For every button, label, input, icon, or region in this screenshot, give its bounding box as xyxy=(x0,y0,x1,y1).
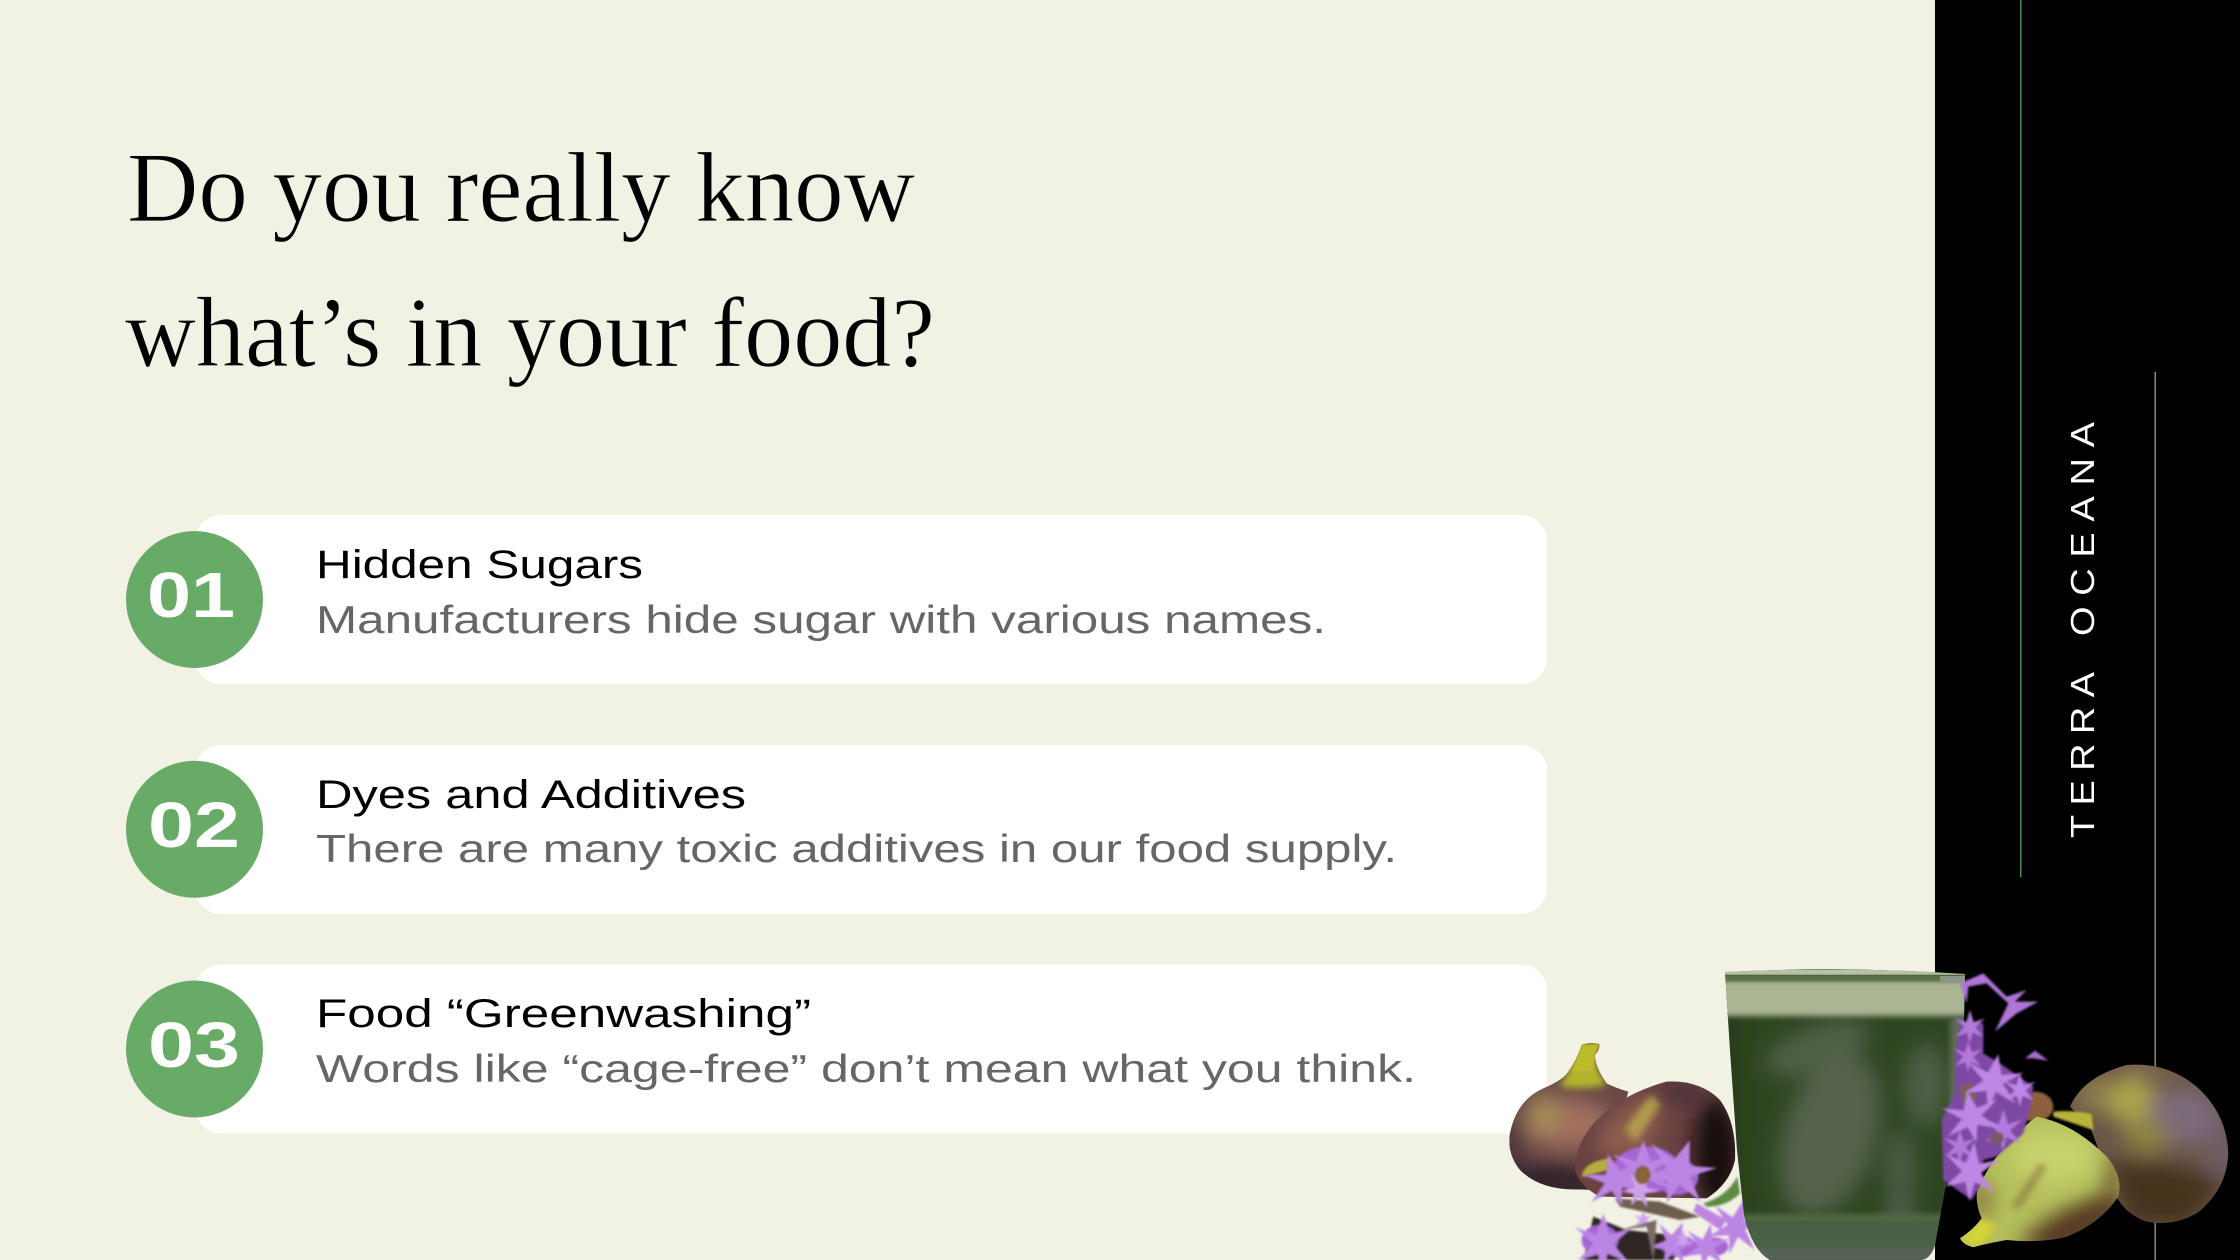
icon: left figs xyxy=(1509,1043,1755,1260)
icon: glass of green juice xyxy=(1720,965,1970,1260)
number badge 02 xyxy=(126,761,263,898)
image: figs, green juice and flowers xyxy=(1490,965,2233,1260)
fig back left xyxy=(1509,1043,1628,1190)
title: what’s in your food? xyxy=(125,277,935,388)
small fig behind xyxy=(2017,1092,2053,1122)
icon: right figs and flowers xyxy=(1939,973,2233,1257)
heading: Dyes and Additives: Dyes and Additives xyxy=(316,773,746,817)
number badge 03: 03 xyxy=(148,1009,240,1081)
fig front left xyxy=(1575,1082,1736,1198)
panel: item 03 xyxy=(126,964,1547,1134)
green vertical line right xyxy=(2154,372,2156,1260)
fig front right xyxy=(1960,1116,2120,1248)
title: Do you really know xyxy=(127,132,915,243)
panel: item 02 xyxy=(126,745,1547,914)
left flower cluster xyxy=(1576,1128,1769,1260)
heading: Hidden Sugars: Hidden Sugars xyxy=(316,543,643,587)
title xyxy=(125,132,935,388)
panel: item 01 xyxy=(126,515,1547,684)
brand name: TERRA OCEANA xyxy=(2064,422,2101,838)
fig back right xyxy=(2070,1064,2228,1223)
card 03 xyxy=(195,964,1547,1134)
description 03: Words like “cage-free” don’t mean what you think. xyxy=(316,1048,1416,1091)
number badge 01 xyxy=(126,531,263,668)
green vertical line left xyxy=(2020,0,2022,877)
number badge 01: 01 xyxy=(147,559,235,631)
fig stem right xyxy=(2053,1111,2093,1130)
card 02 xyxy=(195,745,1547,914)
heading: Food Greenwashing: Food “Greenwashing” xyxy=(316,992,811,1036)
stem xyxy=(1703,1177,1740,1207)
card 01 xyxy=(195,515,1547,684)
number badge 02: 02 xyxy=(148,789,240,861)
description 01: Manufacturers hide sugar with various names. xyxy=(316,599,1326,642)
right flower cluster xyxy=(1939,973,2048,1203)
panel: black side band xyxy=(1935,0,2240,1260)
brand name: TERRA OCEANA: OCEANA xyxy=(2064,422,2101,636)
number badge 03 xyxy=(126,980,263,1118)
description 02: There are many toxic additives in our food supply. xyxy=(316,828,1397,871)
brand name: TERRA OCEANA: TERRA xyxy=(2064,672,2101,838)
